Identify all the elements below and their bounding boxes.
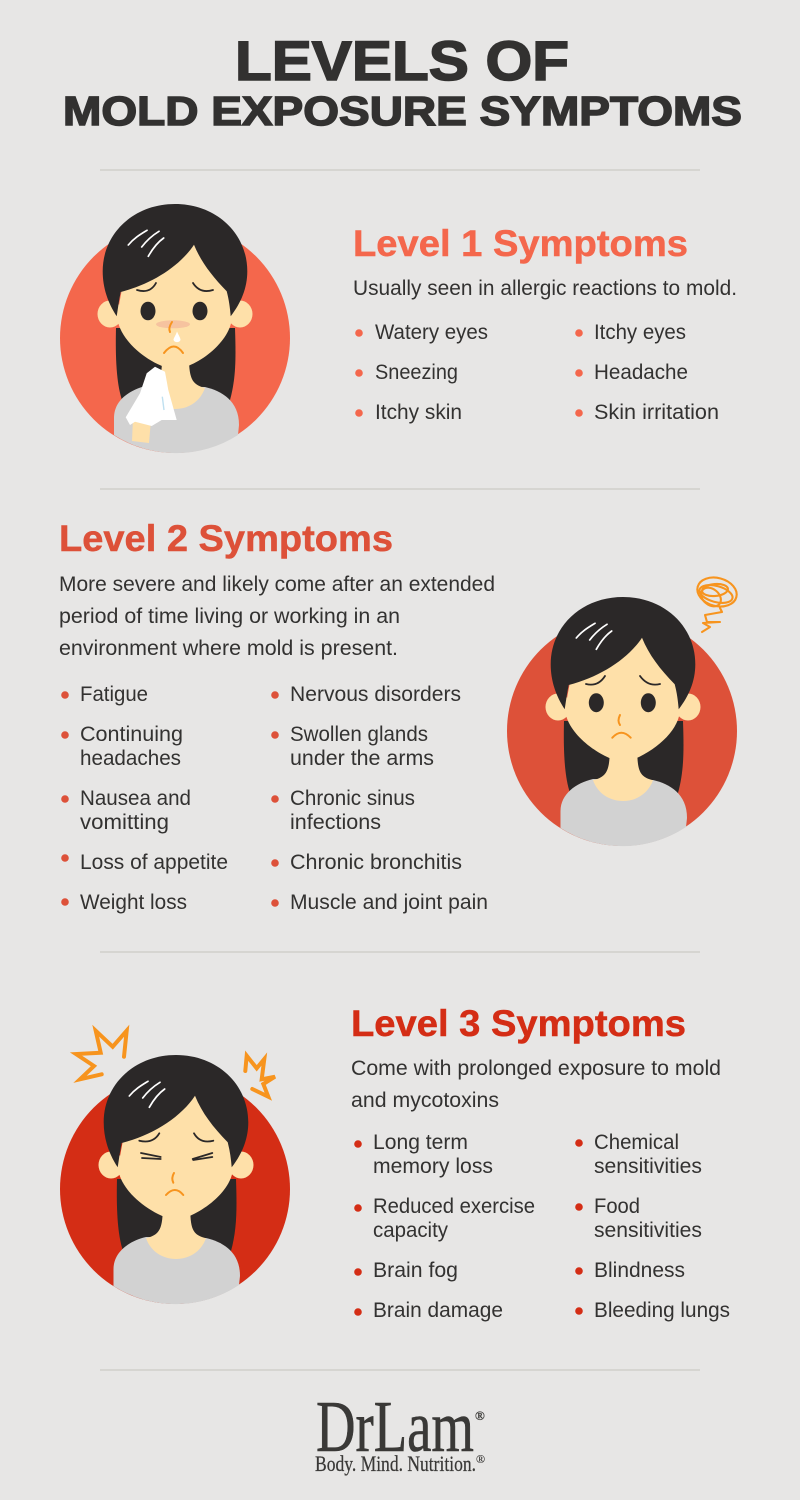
list: level 3 symptoms: Brain damage bbox=[373, 1299, 503, 1322]
heading: level 2: Level 2 Symptoms bbox=[59, 518, 393, 559]
list: level 1 symptoms: Itchy skin bbox=[375, 401, 462, 424]
text: level 3 intro: and mycotoxins bbox=[351, 1089, 499, 1112]
logo: DrLam: DrLam bbox=[316, 1386, 474, 1467]
list: level 2 symptoms: Continuing bbox=[80, 723, 183, 746]
list: level 2 symptoms: Nausea and bbox=[80, 787, 191, 810]
title bbox=[63, 29, 742, 134]
heading: level 3: Level 3 Symptoms bbox=[351, 1003, 686, 1044]
list: level 2 symptoms: Weight loss bbox=[80, 891, 187, 914]
illustration: level 3 woman in pain bbox=[60, 1055, 290, 1304]
list: level 2 symptoms: Muscle and joint pain bbox=[290, 891, 488, 914]
logo: DrLam: Body. Mind. Nutrition. bbox=[315, 1451, 476, 1476]
list: level 2 symptoms: headaches bbox=[80, 747, 181, 770]
list: level 2 symptoms: Nervous disorders bbox=[290, 683, 461, 706]
icon: right pain burst bbox=[245, 1056, 275, 1097]
list: level 2 symptoms: Loss of appetite bbox=[80, 851, 228, 874]
list: level 3 symptoms: Bleeding lungs bbox=[594, 1299, 730, 1322]
list: level 1 symptoms: Sneezing bbox=[375, 361, 458, 384]
title: LEVELS OF bbox=[235, 29, 569, 92]
list: level 1 symptoms: Watery eyes bbox=[375, 321, 488, 344]
text: level 2 intro: environment where mold is present. bbox=[59, 637, 398, 660]
text: level 2 intro bbox=[59, 573, 495, 660]
list: level 3 symptoms: memory loss bbox=[373, 1155, 493, 1178]
icon: left pain burst bbox=[76, 1031, 127, 1079]
list: level 3 symptoms: Chemical bbox=[594, 1131, 679, 1154]
text: level 1 intro: Usually seen in allergic reactions to mold. bbox=[353, 277, 737, 300]
list: level 2 symptoms: Chronic bronchitis bbox=[290, 851, 462, 874]
list: level 2 symptoms: under the arms bbox=[290, 747, 434, 770]
text: level 2 intro: More severe and likely come after an extended bbox=[59, 573, 495, 596]
text: level 3 intro bbox=[351, 1057, 721, 1112]
list: level 3 symptoms: sensitivities bbox=[594, 1219, 702, 1242]
list: level 1 symptoms: Skin irritation bbox=[594, 401, 719, 424]
list: level 3 symptoms: Reduced exercise bbox=[373, 1195, 535, 1218]
list: level 1 symptoms bbox=[355, 321, 719, 424]
list: level 3 symptoms: sensitivities bbox=[594, 1155, 702, 1178]
list: level 2 symptoms: vomitting bbox=[80, 811, 169, 834]
icon: orange scribble bbox=[694, 573, 740, 632]
list: level 1 symptoms: Headache bbox=[594, 361, 688, 384]
list: level 2 symptoms: infections bbox=[290, 811, 381, 834]
illustration: level 1 woman with tissue bbox=[60, 204, 290, 453]
list: level 3 symptoms: Brain fog bbox=[373, 1259, 458, 1282]
illustration: level 2 worried woman bbox=[507, 597, 737, 846]
heading: level 1: Level 1 Symptoms bbox=[353, 223, 688, 264]
title: MOLD EXPOSURE SYMPTOMS bbox=[63, 88, 742, 134]
list: level 3 symptoms: Blindness bbox=[594, 1259, 685, 1282]
list: level 3 symptoms bbox=[354, 1131, 730, 1322]
text: level 2 intro: period of time living or working in an bbox=[59, 605, 400, 628]
logo: DrLam: ® bbox=[476, 1452, 485, 1466]
list: level 1 symptoms: Itchy eyes bbox=[594, 321, 686, 344]
list: level 3 symptoms: capacity bbox=[373, 1219, 448, 1242]
list: level 3 symptoms: Food bbox=[594, 1195, 640, 1218]
list: level 2 symptoms: Chronic sinus bbox=[290, 787, 415, 810]
list: level 3 symptoms: Long term bbox=[373, 1131, 468, 1154]
list: level 2 symptoms bbox=[61, 683, 488, 914]
list: level 2 symptoms: Swollen glands bbox=[290, 723, 428, 746]
text: level 3 intro: Come with prolonged exposure to mold bbox=[351, 1057, 721, 1080]
list: level 2 symptoms: Fatigue bbox=[80, 683, 148, 706]
logo: DrLam: ® bbox=[475, 1408, 485, 1423]
